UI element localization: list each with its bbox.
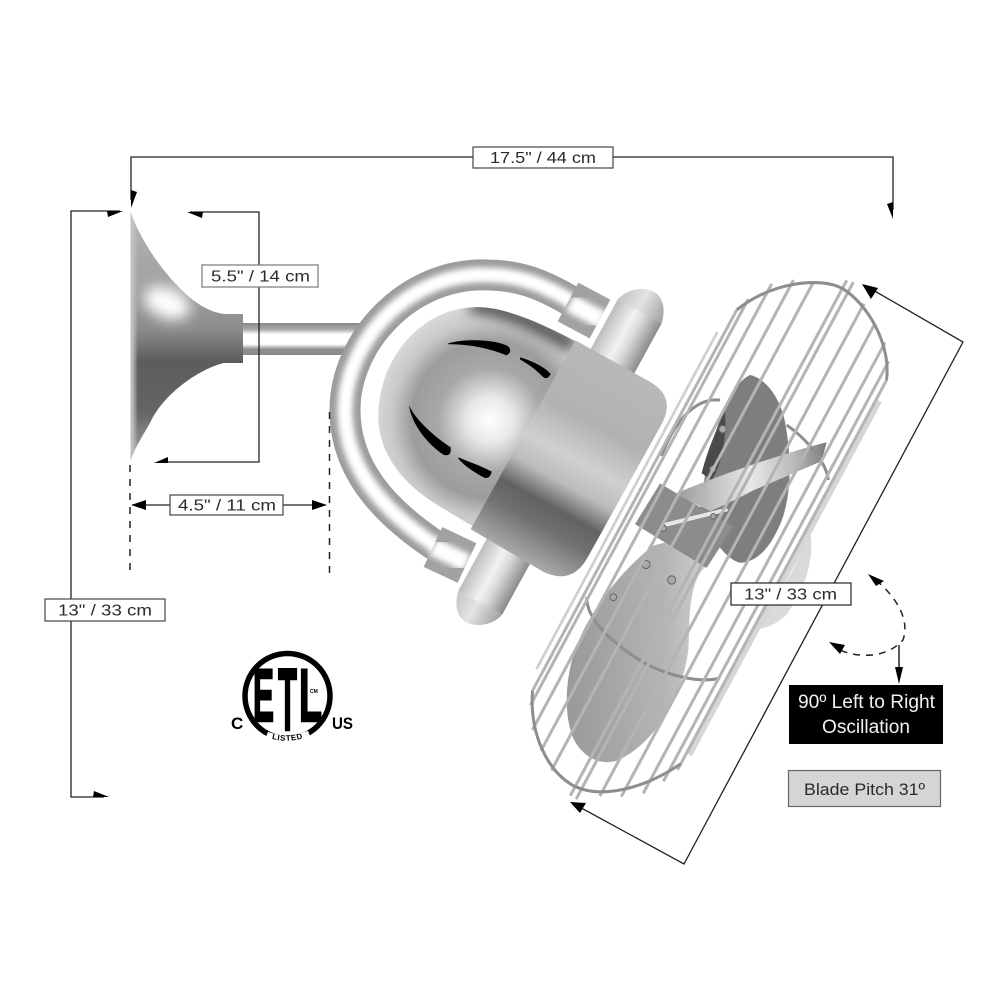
wire cage [492, 234, 922, 838]
motor housing [470, 340, 677, 587]
dimension: cage diameter 13 in: 13" / 33 cm [744, 586, 837, 604]
callout: blade pitch: Blade Pitch 31º [804, 780, 925, 799]
callout: oscillation: Oscillation [822, 717, 910, 738]
ETL listed certification mark: LISTED [272, 734, 302, 741]
oscillation arrows [829, 574, 905, 684]
fan illustration [128, 205, 922, 838]
callout: blade pitch [788, 770, 940, 806]
wall mount flare [128, 205, 243, 467]
mounting arm [243, 323, 361, 355]
dimension: mount width 5.5 in [154, 212, 318, 463]
motor dome [378, 305, 577, 527]
curved yoke tube [345, 275, 602, 563]
hub bracket [635, 484, 733, 568]
ETL listed certification mark: T [278, 650, 297, 749]
ETL listed certification mark: C [231, 714, 243, 733]
upper blade [700, 375, 790, 563]
top cap [618, 278, 673, 323]
dimension: height 13 in [45, 211, 165, 797]
blades and hub [567, 375, 828, 762]
blade root [702, 411, 725, 480]
blade bolts [610, 425, 726, 601]
crossing strut [675, 442, 827, 511]
dimension: height 13 in: 13" / 33 cm [58, 602, 152, 620]
pivot axle [447, 278, 673, 636]
thin strut [663, 508, 728, 527]
dimension: cage diameter 13 in [570, 284, 963, 864]
dimension: overall depth 17.5 in [131, 147, 893, 219]
ETL listed certification mark: L [299, 654, 322, 737]
dimension: projection 4.5 in: 4.5" / 11 cm [178, 498, 276, 514]
callout: oscillation [789, 685, 943, 744]
rear blade [755, 532, 811, 629]
dome vent slots [409, 340, 551, 478]
bottom cap [447, 591, 502, 636]
ETL listed certification mark [231, 650, 353, 749]
dimension: mount width 5.5 in: 5.5" / 14 cm [211, 268, 310, 286]
lower blade [567, 527, 728, 762]
dimension: overall depth 17.5 in: 17.5" / 44 cm [490, 150, 596, 167]
callout: oscillation: 90º Left to Right [798, 692, 936, 713]
dimension: projection 4.5 in [130, 412, 330, 577]
ETL listed certification mark: CM [310, 689, 318, 695]
ETL listed certification mark: E [253, 654, 274, 737]
ETL listed certification mark: US [332, 714, 353, 733]
inner cage rings [587, 400, 828, 680]
